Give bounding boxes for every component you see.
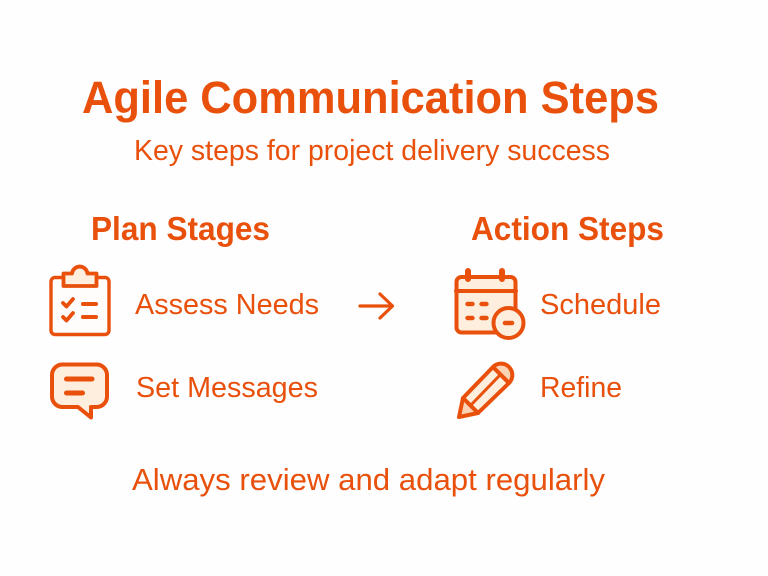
subtitle: Key steps for project delivery success	[134, 135, 610, 167]
heading: plan stages: Plan Stages	[91, 210, 270, 247]
label: refine: Refine	[540, 372, 622, 404]
label: assess needs: Assess Needs	[135, 289, 319, 321]
label: schedule: Schedule	[540, 289, 661, 321]
heading: action steps: Action Steps	[471, 210, 664, 247]
title: Agile Communication Steps	[82, 72, 659, 123]
icon: speech bubble	[52, 364, 107, 418]
icon: pencil	[459, 364, 512, 417]
label: set messages: Set Messages	[136, 372, 318, 404]
footer note: Always review and adapt regularly	[132, 462, 606, 497]
icon: calendar with minus badge	[456, 271, 524, 338]
icon: clipboard checklist	[51, 267, 109, 334]
arrow	[360, 294, 392, 318]
